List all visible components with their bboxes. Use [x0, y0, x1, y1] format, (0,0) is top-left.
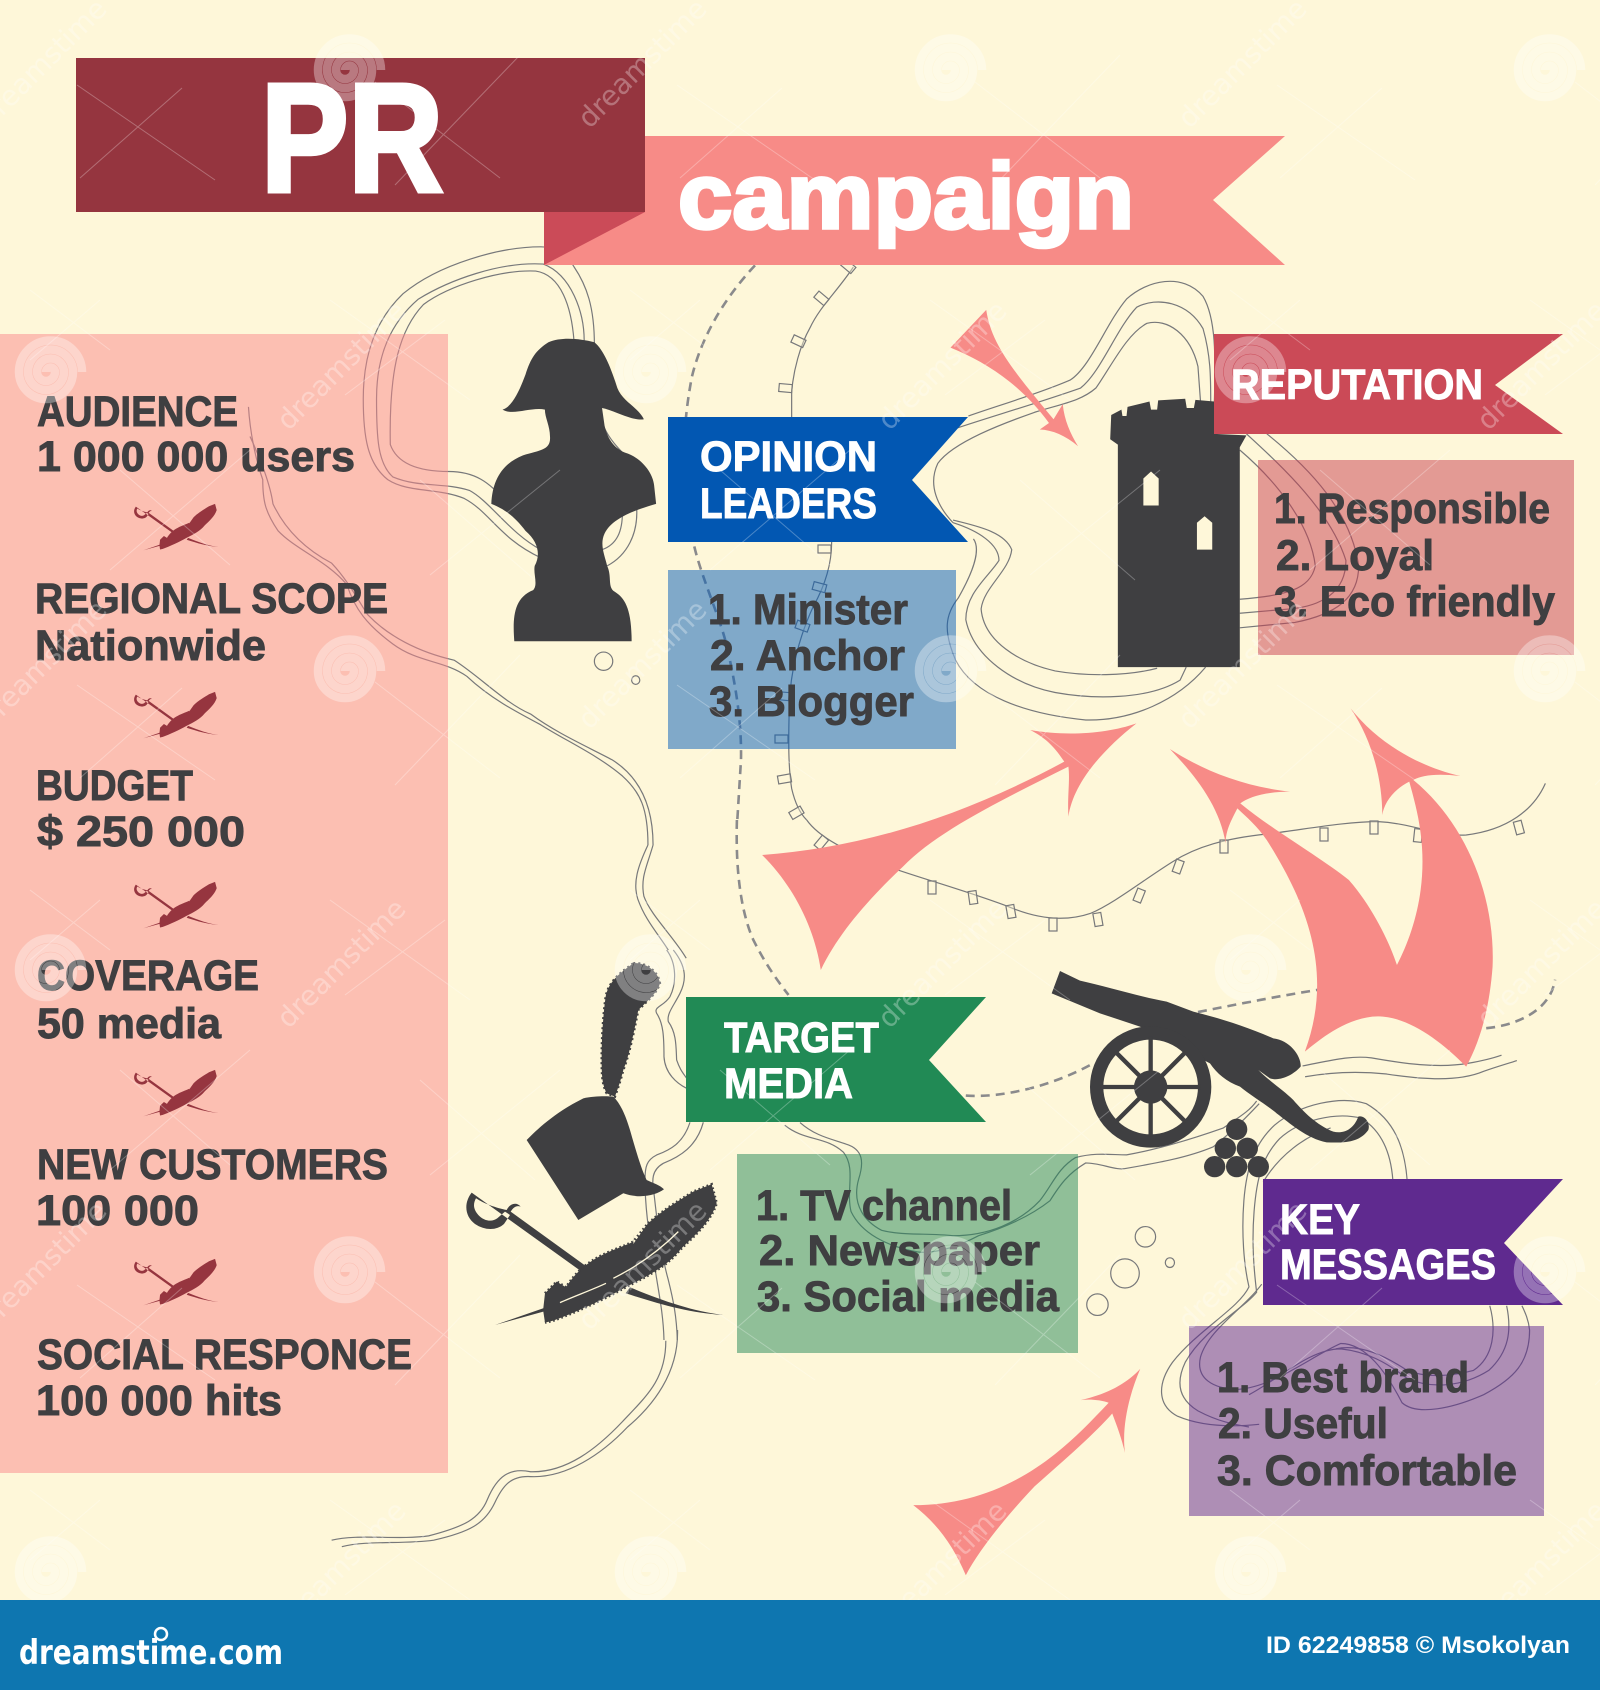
- text: opinion leaders list: 3. Blogger: [709, 678, 914, 726]
- text: campaign metrics: $ 250 000: [37, 808, 245, 856]
- text: opinion leaders list: [708, 586, 914, 726]
- watermark rosettes and text: dreamstime: [571, 593, 713, 735]
- text: campaign metrics: [35, 388, 412, 1425]
- panel: key messages list background: [1189, 1326, 1544, 1516]
- banner: key messages: KEY: [1280, 1196, 1360, 1244]
- banner: reputation: [1214, 334, 1563, 434]
- text: campaign metrics: 100 000 hits: [36, 1377, 282, 1425]
- railway line with ticks: [775, 259, 1545, 931]
- text: key messages list: 3. Comfortable: [1217, 1447, 1517, 1495]
- watermark rosettes and text: dreamstime: [1171, 1194, 1313, 1336]
- text: opinion leaders list: 2. Anchor: [710, 632, 905, 680]
- watermark rosettes and text: dreamstime: [270, 1494, 412, 1636]
- text: target media list: 3. Social media: [757, 1273, 1060, 1321]
- banner: key messages: [1263, 1179, 1563, 1305]
- banner: target media: TARGET: [724, 1014, 879, 1062]
- text: campaign metrics: 100 000: [36, 1187, 199, 1235]
- footer bar: [0, 1600, 1600, 1690]
- text: campaign metrics: 50 media: [37, 1000, 222, 1048]
- banner: opinion leaders: [668, 417, 968, 542]
- text: campaign metrics: Nationwide: [35, 622, 266, 670]
- watermark rosettes and text: dreamstime: [871, 892, 1013, 1034]
- text: campaign metrics: REGIONAL SCOPE: [35, 575, 388, 623]
- banner: opinion leaders: OPINION: [700, 433, 877, 481]
- text: key messages list: 1. Best brand: [1217, 1354, 1469, 1402]
- text: key messages list: [1217, 1354, 1517, 1495]
- watermark rosettes and text: dreamstime: [1171, 593, 1313, 735]
- watermark rosettes and text: dreamstime: [871, 1494, 1013, 1636]
- panel: campaign metrics background: [0, 334, 448, 1473]
- icon: cannon: [1052, 971, 1369, 1177]
- text: reputation list: 2. Loyal: [1276, 532, 1434, 580]
- watermark rosettes and text: dreamstime: [270, 294, 412, 436]
- banner: key messages: MESSAGES: [1280, 1241, 1496, 1289]
- dashed route: [686, 265, 1555, 1096]
- watermark rosettes and text: dreamstime: [571, 1194, 713, 1336]
- icon: tower: [1110, 399, 1246, 667]
- text: reputation list: 3. Eco friendly: [1274, 578, 1555, 626]
- text: campaign metrics: 1 000 000 users: [37, 433, 355, 481]
- icon: shako hat with plume: [527, 963, 664, 1220]
- watermark rosettes and text: dreamstime: [270, 892, 412, 1034]
- icon: napoleon bust: [491, 339, 656, 641]
- text: campaign metrics: BUDGET: [36, 762, 193, 810]
- icon: crossed sword and feather large: [466, 1184, 723, 1325]
- text: reputation list: [1274, 485, 1555, 626]
- arrow: top centre small arrow: [951, 310, 1078, 446]
- banner: PR title: [76, 52, 645, 224]
- text: opinion leaders list: 1. Minister: [708, 586, 908, 634]
- icons: small crossed sword and feather dividers: [134, 504, 219, 1305]
- banner: campaign ribbon: [544, 136, 1285, 265]
- banner: target media: MEDIA: [724, 1060, 853, 1108]
- banner: PR title: PR: [261, 52, 443, 224]
- panel: target media list background: [737, 1154, 1078, 1353]
- banner: campaign ribbon: campaign: [678, 144, 1134, 248]
- banner: target media: [686, 997, 986, 1122]
- text: key messages list: 2. Useful: [1218, 1400, 1388, 1448]
- text: campaign metrics: SOCIAL RESPONCE: [37, 1331, 412, 1379]
- footer bar: dreamstime.com: [19, 1633, 283, 1673]
- text: target media list: 2. Newspaper: [759, 1227, 1040, 1275]
- map river lines: [248, 247, 1530, 1547]
- arrow: double sail arrow: [1170, 708, 1493, 1067]
- arrow: bottom arrow: [913, 1369, 1140, 1575]
- panel: reputation list background: [1258, 460, 1574, 655]
- banner: opinion leaders: LEADERS: [700, 480, 877, 528]
- panel: opinion leaders list background: [668, 570, 956, 749]
- banner: reputation: REPUTATION: [1231, 361, 1483, 409]
- text: reputation list: 1. Responsible: [1274, 485, 1550, 533]
- arrow: large left arrow: [762, 723, 1136, 970]
- text: campaign metrics: AUDIENCE: [37, 388, 238, 436]
- watermark rosettes and text: dreamstime: [871, 294, 1013, 436]
- text: campaign metrics: NEW CUSTOMERS: [37, 1141, 388, 1189]
- footer bar: ID 62249858 © Msokolyan: [1266, 1632, 1570, 1659]
- text: target media list: [756, 1182, 1060, 1321]
- text: target media list: 1. TV channel: [756, 1182, 1012, 1230]
- text: campaign metrics: COVERAGE: [37, 952, 259, 1000]
